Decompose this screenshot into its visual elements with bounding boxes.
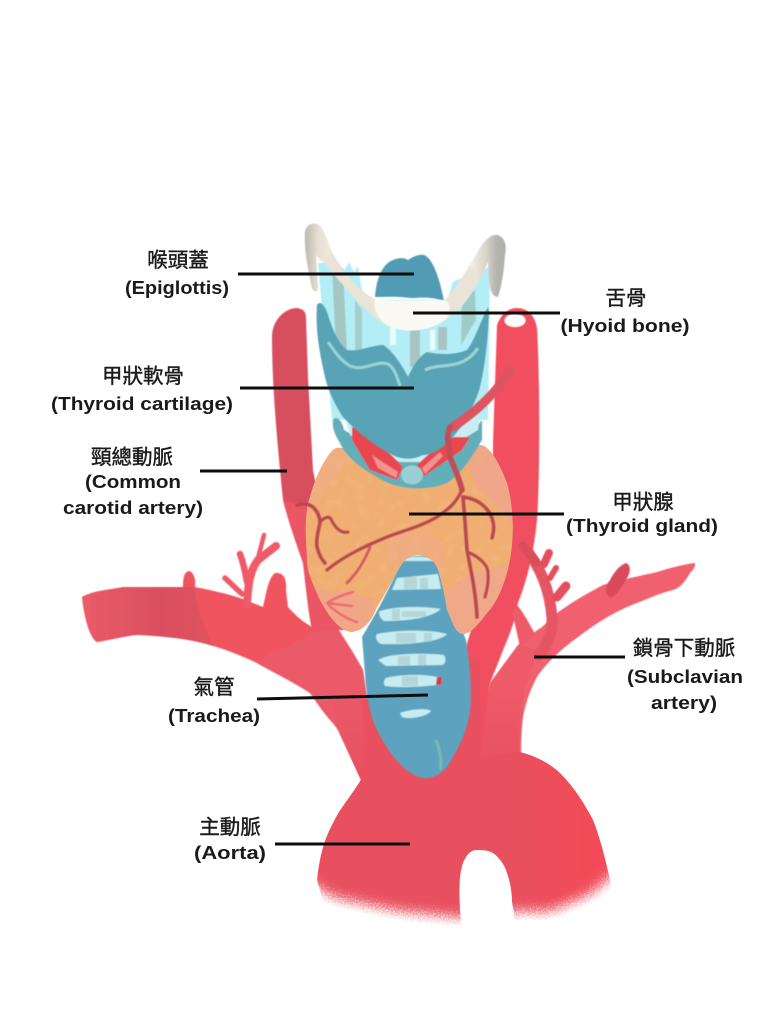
aorta right-side brighter tone: [510, 752, 612, 920]
label: common carotid artery: [63, 446, 203, 518]
label: hyoid bone: 舌骨: [606, 287, 646, 310]
label: epiglottis: [125, 249, 229, 298]
label: subclavian artery: (Subclavian: [627, 667, 743, 687]
right common carotid artery: [430, 308, 539, 775]
right subclavian artery: [470, 563, 695, 775]
label: thyroid gland: (Thyroid gland): [566, 516, 718, 536]
epiglottis: [375, 255, 444, 301]
thyroid anatomy diagram: [52, 223, 742, 925]
label: subclavian artery: artery): [651, 693, 717, 713]
label: subclavian artery: [627, 637, 743, 713]
label: thyroid gland: 甲狀腺: [612, 491, 674, 514]
aorta: [295, 660, 640, 965]
label: common carotid artery: carotid artery): [63, 498, 203, 518]
label: epiglottis: (Epiglottis): [125, 278, 229, 298]
label: thyroid cartilage: (Thyroid cartilage): [51, 394, 233, 414]
label: aorta: (Aorta): [194, 843, 266, 863]
label: thyroid cartilage: 甲狀軟骨: [102, 365, 184, 388]
trachea: [362, 556, 471, 778]
aorta arch: [317, 752, 612, 925]
leader lines: [200, 274, 625, 844]
vessel to aorta blend: [330, 690, 524, 782]
label: thyroid cartilage: [51, 365, 233, 414]
hyoid connective tissue: [318, 262, 490, 420]
red base behind trachea: [362, 660, 480, 790]
hyoid left horn: [305, 224, 332, 292]
label: common carotid artery: 頸總動脈: [91, 446, 173, 469]
left common carotid artery: [272, 308, 345, 630]
cricoid centre: [401, 466, 423, 484]
label: common carotid artery: (Common: [85, 472, 181, 492]
right subclavian stub: [606, 563, 630, 598]
label: trachea: [168, 676, 260, 726]
hyoid right horn: [470, 235, 506, 297]
cricoid cartilage: [333, 415, 482, 488]
tracheal rings: [376, 557, 447, 718]
thyroid gland: [306, 445, 513, 634]
label: thyroid gland: [566, 491, 718, 536]
red spot on trachea: [436, 677, 442, 685]
label: subclavian artery: 鎖骨下動脈: [633, 637, 735, 660]
thyroid arteries: [297, 370, 510, 622]
carotid connecting strip: [512, 606, 535, 647]
left subclavian artery: [82, 535, 380, 785]
hyoid bone: [305, 224, 506, 331]
thyroid pink edges: [468, 445, 513, 527]
label: epiglottis: 喉頭蓋: [147, 249, 209, 272]
right carotid opening: [504, 314, 526, 327]
aorta fading lower edge: [295, 868, 640, 965]
label: hyoid bone: [560, 287, 690, 336]
thyroid cartilage: [317, 303, 489, 459]
label: aorta: 主動脈: [199, 816, 261, 839]
hyoid body: [374, 299, 450, 331]
trachea highlight streak: [436, 740, 441, 770]
right subclavian branches: [523, 546, 566, 655]
cricothyroid muscle left: [352, 427, 403, 480]
label: trachea: (Trachea): [168, 706, 260, 726]
left subclavian branches: [225, 535, 276, 604]
label: hyoid bone: (Hyoid bone): [560, 316, 690, 336]
label: aorta: [194, 816, 266, 863]
label: trachea: 氣管: [194, 676, 234, 699]
tracheal ring midtones: [392, 577, 432, 686]
cricothyroid muscle right: [417, 437, 470, 477]
